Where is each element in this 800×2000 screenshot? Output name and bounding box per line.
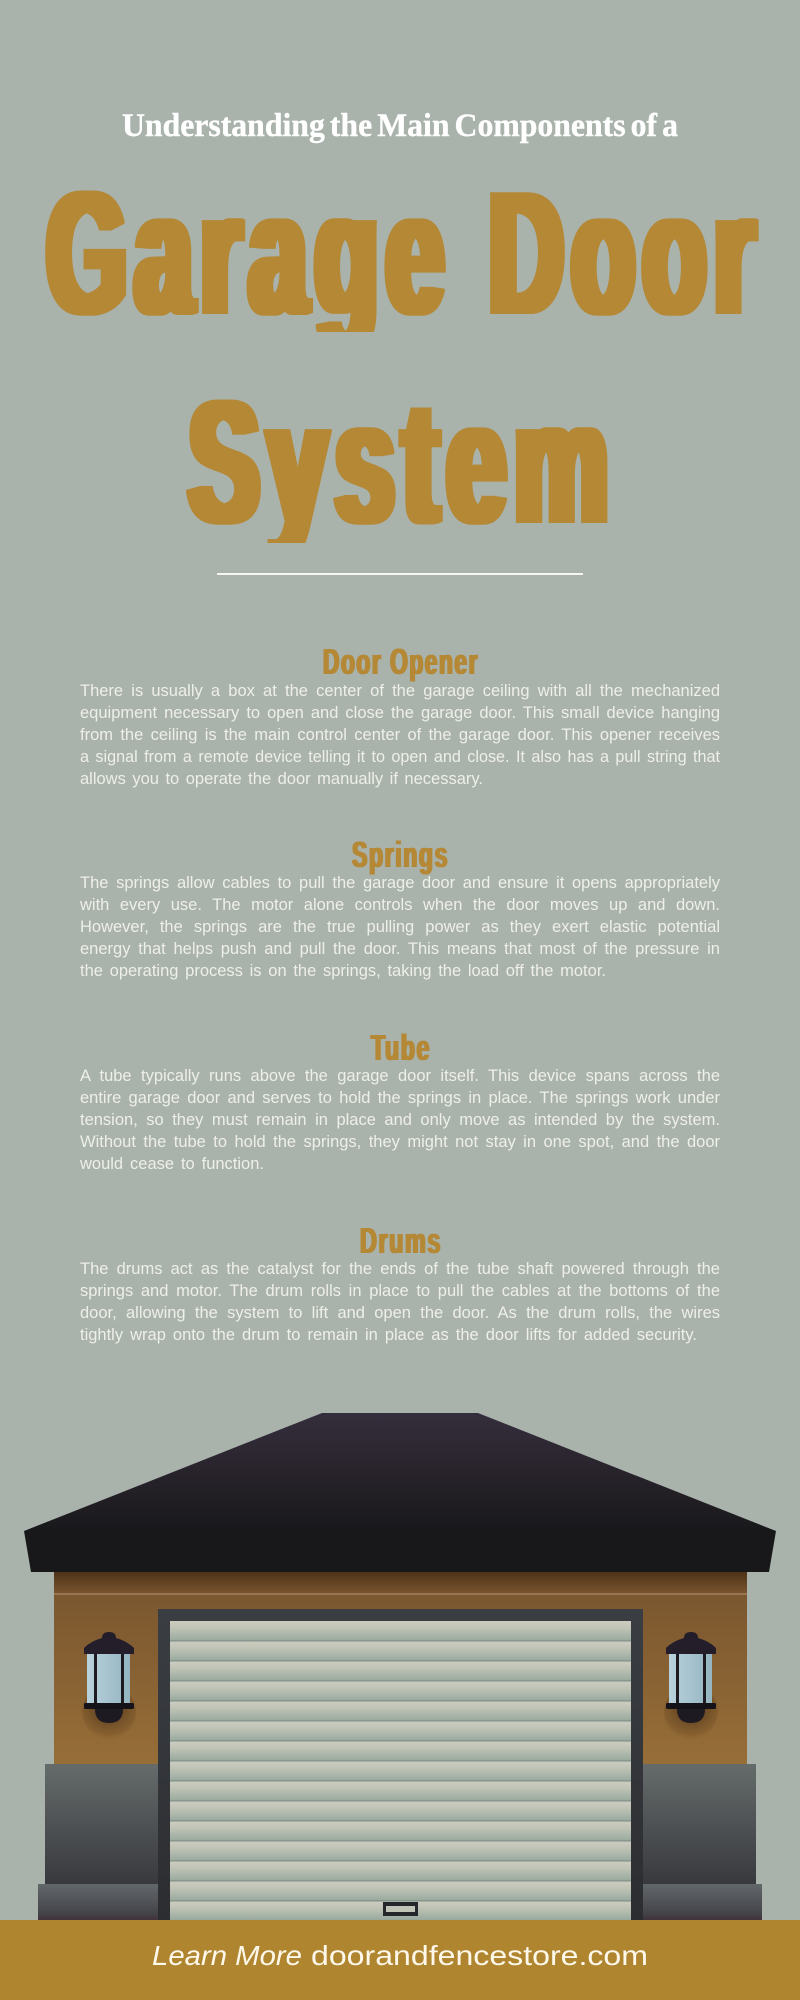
footer text: website: doorandfencestore.com (311, 1940, 648, 1971)
body text: Drums: door, allowing the system to lift and open the door. As the drum rolls, the wires (80, 1304, 720, 1322)
lamp right (664, 1632, 718, 1739)
footer bar (0, 1920, 800, 2000)
roof (24, 1413, 776, 1572)
wall top band (54, 1572, 747, 1594)
body text: Tube: Without the tube to hold the springs, they might not stay in one spot, and the door (80, 1132, 720, 1150)
body text: Springs (80, 874, 720, 980)
body text: Drums: springs and motor. The drum rolls in place to pull the cables at the bottoms of the (80, 1282, 720, 1300)
body text: Drums: The drums act as the catalyst for the ends of the tube shaft powered through the (80, 1260, 720, 1278)
body text: Springs: The springs allow cables to pull the garage door and ensure it opens appropriately (80, 874, 720, 892)
body text: Drums: tightly wrap onto the drum to remain in place as the door lifts for added security. (80, 1326, 697, 1344)
heading: Tube: Tube (371, 1027, 431, 1068)
body text: Door Opener: There is usually a box at the center of the garage ceiling with all the mechanized (80, 682, 720, 700)
body text: Door Opener (80, 682, 720, 788)
body text: Door Opener: a signal from a remote device telling it to open and close. It also has a pull string that (80, 748, 720, 766)
door frame (158, 1609, 643, 1920)
body text: Springs: energy that helps push and pull the door. This means that most of the pressure in (80, 940, 720, 958)
body text: Tube: tension, so they must remain in place and only move as intended by the system. (80, 1110, 720, 1128)
heading: Drums: Drums (360, 1220, 442, 1261)
body text: Tube: A tube typically runs above the garage door itself. This device spans across the (80, 1066, 720, 1084)
base step left (38, 1884, 158, 1920)
stone base right (643, 1764, 756, 1884)
body text: Door Opener: allows you to operate the door manually if necessary. (80, 770, 483, 788)
title: understanding line: Understanding the Main Components of a (122, 108, 678, 144)
body text: Tube (80, 1066, 720, 1172)
roller door slats (170, 1621, 631, 1920)
heading: Door Opener: Door Opener (323, 641, 479, 682)
illustration: garage (24, 1413, 776, 1920)
body text: Springs: the operating process is on the springs, taking the load off the motor. (80, 962, 606, 980)
door handle (383, 1902, 418, 1916)
garage wall (54, 1572, 747, 1764)
body text: Door Opener: equipment necessary to open and close the garage door. This small device hanging (80, 704, 720, 722)
base step right (643, 1884, 762, 1920)
body text: Tube: would cease to function. (80, 1154, 264, 1172)
body text: Drums (80, 1260, 720, 1344)
stone base left (45, 1764, 158, 1884)
body text: Springs: However, the springs are the true pulling power as they exert elastic potential (80, 918, 720, 936)
heading: Springs: Springs (352, 834, 449, 875)
body text: Door Opener: from the ceiling is the main control center of the garage door. This opener receives (80, 726, 720, 744)
body text: Tube: entire garage door and serves to hold the springs in place. The springs work under (80, 1088, 720, 1106)
title divider (217, 573, 583, 575)
body text: Springs: with every use. The motor alone controls when the door moves up and down. (80, 896, 720, 914)
footer text: Learn More: Learn More (152, 1940, 302, 1971)
lamp left (82, 1632, 136, 1739)
